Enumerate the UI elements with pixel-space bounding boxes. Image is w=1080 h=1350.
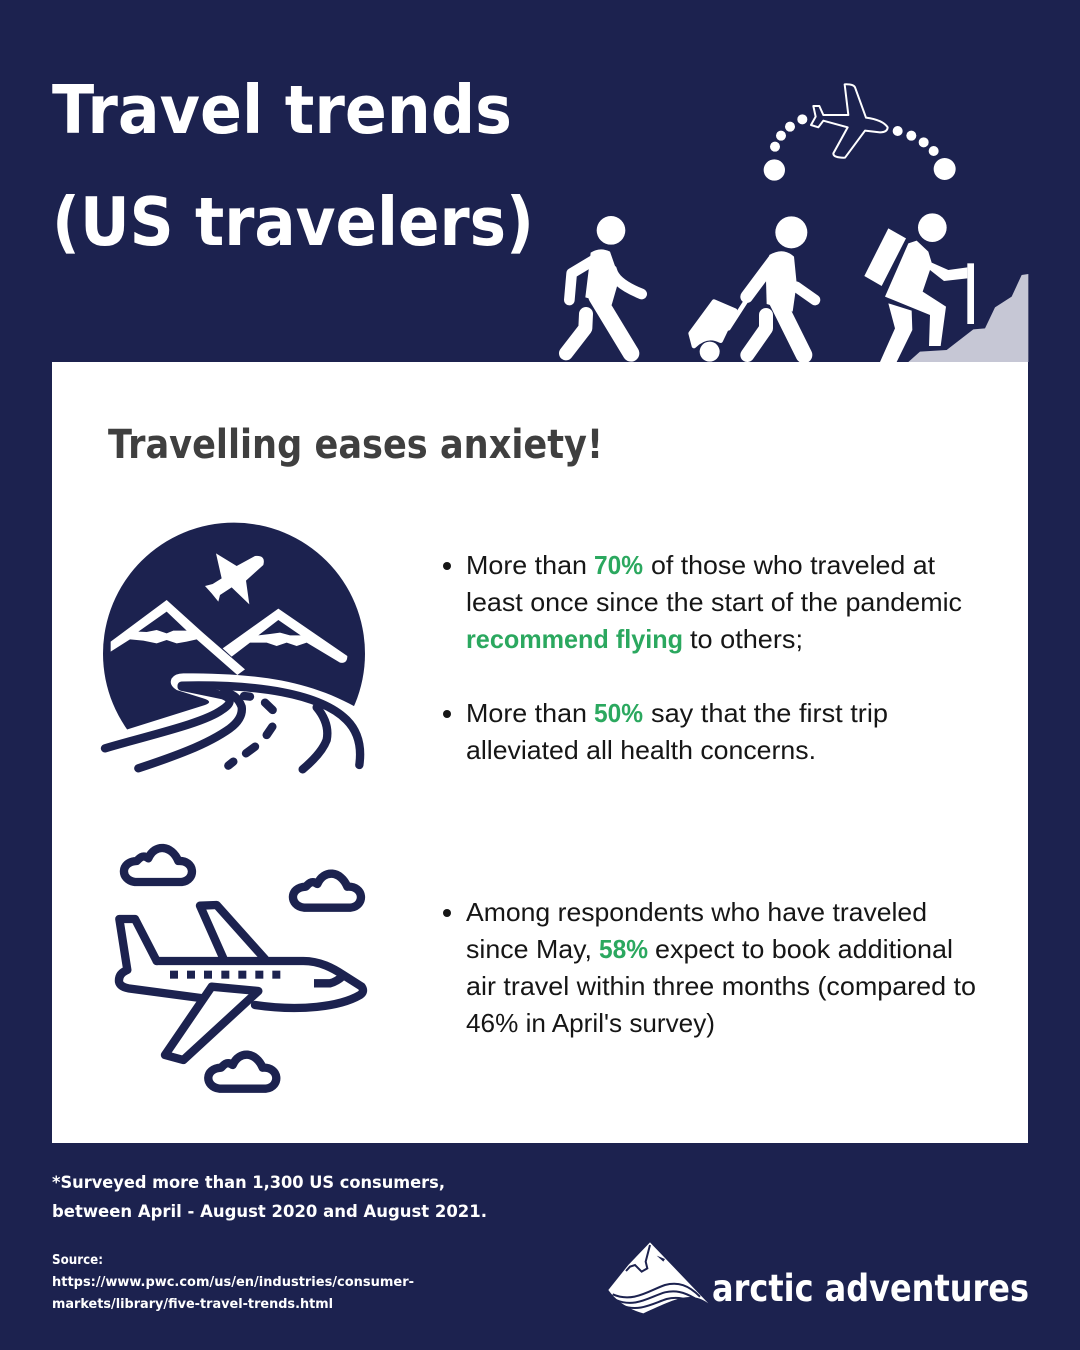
heading: Travelling eases anxiety! — [108, 422, 603, 468]
text block: second bullet: Among respondents who have traveled — [466, 897, 927, 927]
footnote: survey note: *Surveyed more than 1,300 US consumers, — [52, 1173, 445, 1193]
title: Travel trends — [52, 71, 512, 149]
text block: first bullets: of those who traveled at — [651, 550, 936, 580]
icon: mountain road and plane — [93, 523, 383, 790]
footnote: survey note — [52, 1173, 487, 1222]
source citation — [52, 1252, 414, 1312]
text block: second bullet: 46% in April's survey) — [466, 1008, 715, 1038]
icon: airplane and clouds — [119, 848, 363, 1089]
text block: first bullets: to others; — [690, 624, 803, 654]
text block: second bullet — [443, 897, 976, 1038]
panel: white content card — [52, 362, 1028, 1143]
icon: person pulling suitcase — [691, 216, 815, 362]
source citation: https://www.pwc.com/us/en/industries/consumer- — [52, 1274, 414, 1290]
text block: first bullets: alleviated all health concerns. — [466, 735, 816, 765]
text block: first bullets: recommend flying — [466, 624, 683, 654]
icon: flight path with plane — [764, 84, 956, 181]
text block: first bullets: 50% — [594, 698, 643, 728]
text block: first bullets: least once since the start of the pandemic — [466, 587, 962, 617]
text block: first bullets: 70% — [594, 550, 643, 580]
footnote: survey note: between April - August 2020 and August 2021. — [52, 1202, 487, 1222]
text block: second bullet: expect to book additional — [655, 934, 953, 964]
source citation: markets/library/five-travel-trends.html — [52, 1296, 333, 1312]
text block: first bullets: More than — [466, 550, 587, 580]
source citation: Source: — [52, 1252, 103, 1268]
logo: arctic adventures: arctic adventures — [712, 1267, 1029, 1310]
text block: first bullets — [443, 550, 962, 765]
text block: first bullets: More than — [466, 698, 587, 728]
text block: second bullet: air travel within three months (compared to — [466, 971, 976, 1001]
icon: walking person — [566, 216, 642, 353]
text block: second bullet: 58% — [599, 934, 648, 964]
text block: first bullets: say that the first trip — [651, 698, 888, 728]
icon: hiker on mountain — [864, 213, 1028, 362]
logo: arctic adventures — [608, 1242, 1029, 1313]
title — [52, 71, 534, 261]
text block: second bullet: since May, — [466, 934, 592, 964]
title: (US travelers) — [52, 183, 534, 261]
